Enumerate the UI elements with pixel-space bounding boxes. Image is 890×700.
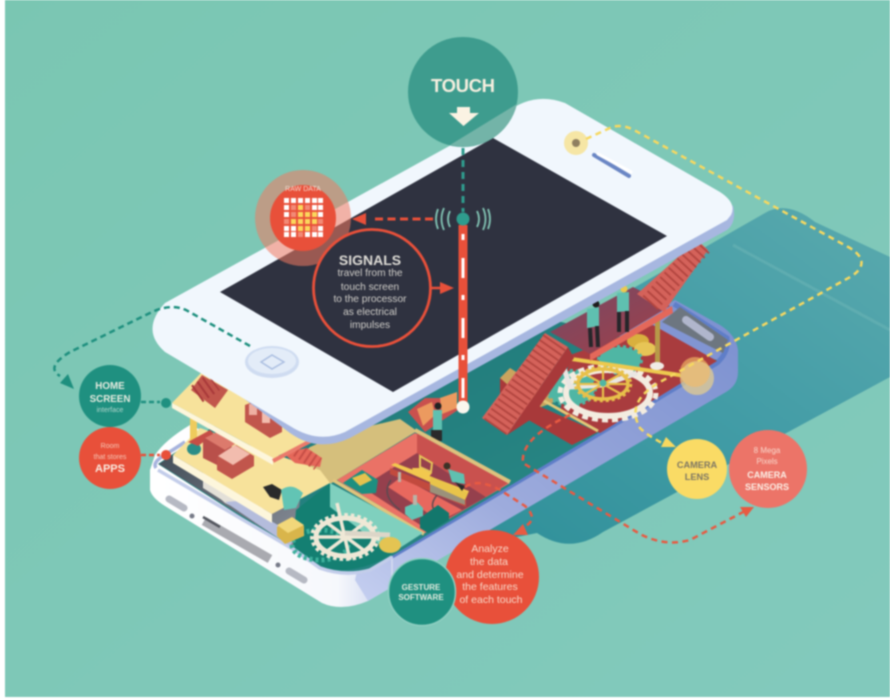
- earpiece: [594, 154, 631, 176]
- conveyor table: [390, 456, 469, 507]
- path: camera lens: [586, 126, 862, 447]
- callout: home screen: [79, 365, 171, 427]
- touch point: [456, 212, 470, 226]
- white gear: [560, 365, 656, 420]
- callout: apps: Room: [101, 443, 119, 450]
- callout: camera sensors: 8 Mega: [754, 446, 781, 455]
- path: gesture software: [465, 483, 532, 535]
- worker one: [587, 300, 600, 347]
- callout: gesture software: SOFTWARE: [398, 593, 444, 602]
- callout: apps: [79, 427, 171, 489]
- callout: signals: touch screen: [341, 282, 399, 293]
- touch dashes: [462, 148, 464, 212]
- light teal wall: [330, 483, 423, 553]
- arrow: to raw data: [352, 213, 433, 225]
- phone base body: [150, 290, 738, 607]
- callout: touch: TOUCH: [431, 75, 495, 96]
- battery cavity: [159, 435, 300, 548]
- callout: camera lens: [667, 439, 727, 499]
- callout: signals: as electrical: [343, 307, 397, 318]
- path: camera sensors: [523, 415, 754, 542]
- inner floor: [158, 290, 717, 573]
- upper platform: [482, 240, 708, 435]
- callout: analyze: and determine: [456, 569, 524, 581]
- callout: signals: to the processor: [333, 294, 407, 305]
- callout: signals: travel from the: [337, 268, 403, 279]
- callout: analyze: Analyze: [471, 543, 509, 555]
- rim blue upper lip: [392, 304, 727, 556]
- callout: analyze: [445, 530, 539, 624]
- gold crate: [277, 517, 304, 544]
- post: [655, 320, 660, 366]
- pillar: [187, 418, 214, 455]
- bottom gear room: [292, 483, 423, 570]
- yellow lever: [565, 356, 693, 379]
- dark floor: [293, 483, 392, 570]
- signal waves: [436, 208, 490, 230]
- callout: signals: SIGNALS: [339, 252, 401, 268]
- callout: analyze: of each touch: [459, 594, 523, 606]
- callout: gesture software: [388, 558, 456, 626]
- callout: home screen: interface: [97, 407, 124, 414]
- green crates: [343, 470, 449, 533]
- pixel grid: [284, 198, 323, 237]
- orange rear wall and standing worker: [408, 392, 458, 441]
- callout: apps: that stores: [94, 454, 127, 461]
- small machine: [405, 495, 423, 520]
- upper left slab: [172, 372, 320, 465]
- callout: raw data: [255, 170, 351, 266]
- screen: [220, 138, 667, 392]
- glass front: [152, 99, 733, 437]
- path: home button to home screen: [54, 307, 250, 389]
- cables: [387, 480, 445, 516]
- touch arrow: [449, 107, 479, 126]
- callout: home screen: HOME: [95, 381, 125, 392]
- phone shadow: [400, 208, 890, 560]
- callout: camera sensors: CAMERA: [747, 470, 787, 480]
- callout: gesture software: GESTURE: [402, 583, 441, 592]
- callout: raw data: RAW DATA: [285, 186, 321, 193]
- callout: camera sensors: SENSORS: [745, 482, 789, 492]
- worker at table: [444, 462, 465, 491]
- worker two: [617, 286, 629, 332]
- teal figure: [281, 487, 303, 510]
- lower gear room: [500, 320, 717, 445]
- small stairs: [283, 448, 322, 467]
- home button: [245, 346, 299, 378]
- teal gears: [547, 347, 641, 405]
- callout: analyze: the data: [470, 556, 508, 568]
- callout: camera lens: LENS: [685, 472, 709, 482]
- callout: camera sensors: Pixels: [756, 457, 778, 466]
- glass side edge: [152, 205, 734, 444]
- stairs right: [637, 240, 708, 312]
- earpiece slot: [662, 307, 728, 353]
- inner lip: [155, 442, 185, 468]
- coins: [379, 537, 401, 553]
- callout: home screen: SCREEN: [90, 394, 130, 405]
- signal line: [436, 148, 490, 414]
- callout: touch: [408, 37, 518, 147]
- body: white side: [150, 425, 400, 607]
- tan shadow area: [293, 419, 417, 484]
- callout: camera lens: CAMERA: [677, 460, 718, 470]
- seam: [391, 556, 393, 598]
- upper left stairs: [191, 375, 228, 408]
- coins: [627, 334, 656, 356]
- stairs centre: [482, 333, 574, 435]
- body: blue side: [355, 300, 738, 601]
- connector: [141, 454, 160, 456]
- lower seats: [203, 432, 254, 479]
- yellow gear: [575, 367, 631, 401]
- callout: signals: impulses: [350, 320, 390, 331]
- upper seats: [245, 400, 282, 438]
- arrow: signals to line: [430, 282, 454, 294]
- middle room with assembly line: [333, 430, 510, 534]
- callout: camera sensors: [729, 430, 807, 508]
- callout: analyze: the features: [462, 581, 518, 593]
- callout: signals: [314, 230, 430, 346]
- camera lens hotspot: [680, 357, 714, 395]
- lower gear: [292, 503, 390, 560]
- red base block: [500, 368, 598, 445]
- camera hole: [564, 131, 588, 155]
- lower left slab: [173, 418, 330, 544]
- callout: apps: APPS: [95, 463, 125, 475]
- phone top panel: [152, 99, 734, 444]
- speaker and dock holes: [169, 499, 304, 580]
- connector: [141, 401, 160, 403]
- penguin figure: [263, 484, 282, 500]
